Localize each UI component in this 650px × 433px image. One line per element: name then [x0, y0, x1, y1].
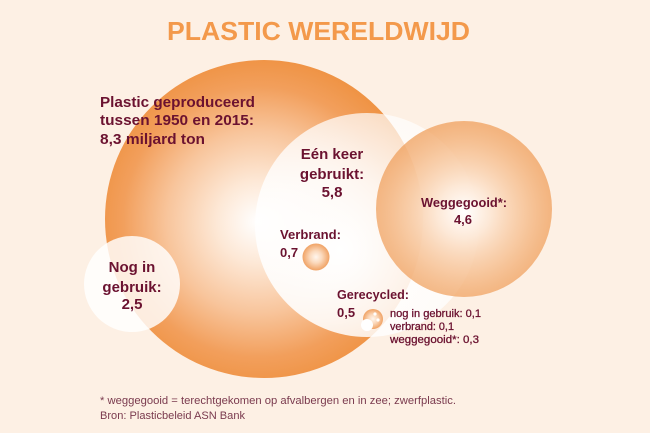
text: burned	[280, 228, 341, 260]
circle: used once	[255, 113, 479, 337]
text: still in use: Nog in	[109, 259, 155, 276]
text: still in use	[102, 259, 162, 313]
icon: burned circle	[302, 244, 330, 270]
footnote: * weggegooid = terechtgekomen op afvalbergen en in zee; zwerfplastic.	[100, 395, 456, 407]
text: burned: 0,7	[280, 245, 298, 260]
footnote	[100, 395, 456, 422]
text: used once: 5,8	[322, 184, 342, 201]
text: discarded	[421, 196, 507, 227]
text: used once	[300, 146, 364, 201]
circle: still in use	[84, 236, 180, 332]
circle: discarded	[376, 121, 552, 297]
footnote: Bron: Plasticbeleid ASN Bank	[100, 410, 245, 422]
text: recycled breakdown: weggegooid*: 0,3	[389, 334, 479, 346]
text: used once: gebruikt:	[300, 166, 364, 183]
text: recycled breakdown: nog in gebruik: 0,1	[390, 308, 481, 320]
text: recycled: Gerecycled:	[337, 288, 409, 302]
text: recycled breakdown	[389, 308, 481, 346]
icon: recycled circle	[361, 309, 383, 331]
text: still in use: 2,5	[122, 296, 142, 313]
title: PLASTIC WERELDWIJD	[167, 16, 470, 46]
text: plastic produced: 8,3 miljard ton	[100, 132, 205, 148]
text: burned: Verbrand:	[280, 228, 341, 242]
text: discarded: 4,6	[454, 212, 472, 227]
text: discarded: Weggegooid*:	[421, 196, 507, 210]
text: plastic produced: tussen 1950 en 2015:	[100, 113, 254, 129]
text: plastic produced	[100, 95, 255, 148]
text: recycled: 0,5	[337, 305, 355, 320]
text: recycled breakdown: verbrand: 0,1	[390, 321, 454, 333]
circle: plastic produced	[105, 60, 423, 378]
text: still in use: gebruik:	[102, 279, 162, 296]
text: used once: Eén keer	[301, 146, 363, 163]
text: recycled	[337, 288, 409, 320]
text: plastic produced: Plastic geproduceerd	[100, 95, 255, 111]
